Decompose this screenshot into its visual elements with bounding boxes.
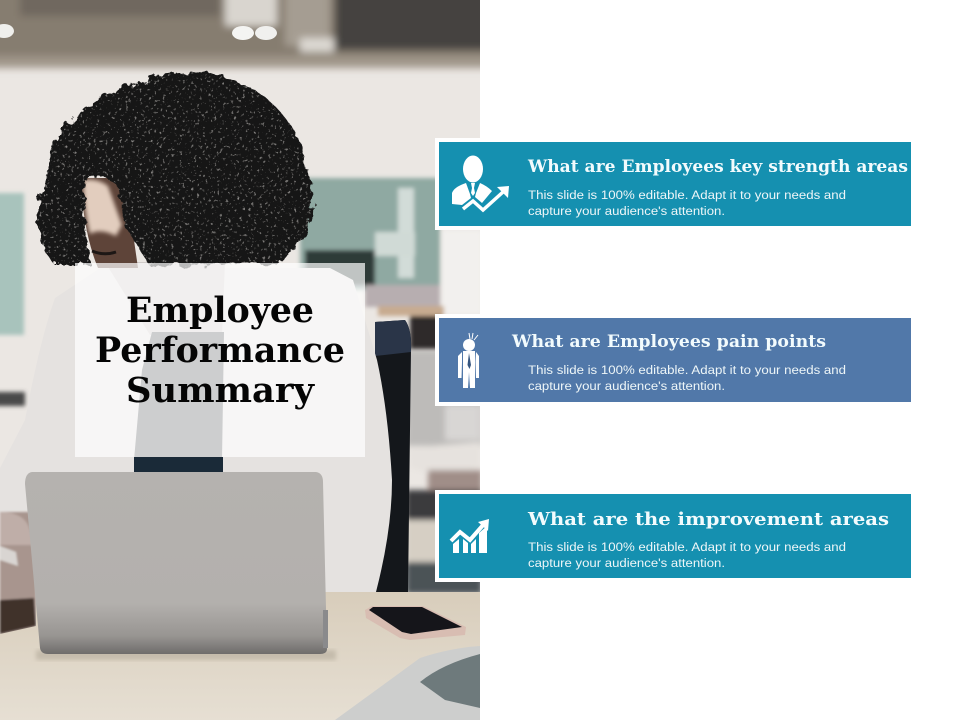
- title: Performance: [95, 330, 345, 371]
- description: This slide is 100% editable. Adapt it to your needs and: [528, 188, 846, 202]
- description: This slide is 100% editable. Adapt it to your needs and: [528, 540, 846, 554]
- icon: stressed employee: [458, 333, 479, 388]
- photo: woman working at a laptop: [0, 0, 490, 720]
- icon: growth chart: [451, 519, 489, 553]
- description: capture your audience's attention.: [528, 379, 725, 393]
- icon: employee with rising arrow: [452, 156, 509, 210]
- ceiling lights: [0, 24, 277, 40]
- panel: improvement areas: [435, 490, 912, 582]
- panel: key strength areas: [435, 138, 912, 230]
- description: capture your audience's attention.: [528, 204, 725, 218]
- face: [80, 178, 138, 268]
- panel: pain points: [435, 314, 912, 406]
- title: Employee: [126, 290, 314, 331]
- heading: What are the improvement areas: [527, 509, 889, 530]
- description: [528, 188, 846, 218]
- hair: [38, 72, 312, 266]
- hand: [0, 512, 36, 636]
- description: [528, 363, 846, 393]
- heading: What are Employees pain points: [511, 332, 826, 352]
- phone: [365, 606, 466, 640]
- laptop: [25, 472, 328, 654]
- ceiling: [0, 0, 490, 68]
- background windows: [0, 178, 482, 406]
- neck and chest: [137, 262, 224, 268]
- description: [528, 540, 846, 570]
- table: [0, 592, 480, 720]
- heading: What are Employees key strength areas: [527, 157, 908, 177]
- jacket: [300, 268, 392, 592]
- blurred people in background: [406, 350, 482, 594]
- description: capture your audience's attention.: [528, 556, 725, 570]
- panel: title backdrop: [75, 263, 365, 457]
- title: [95, 290, 345, 411]
- title: Summary: [126, 370, 316, 411]
- foreground laptop corner: [335, 646, 480, 720]
- description: This slide is 100% editable. Adapt it to your needs and: [528, 363, 846, 377]
- chair: [375, 320, 411, 592]
- shirt: [134, 332, 224, 460]
